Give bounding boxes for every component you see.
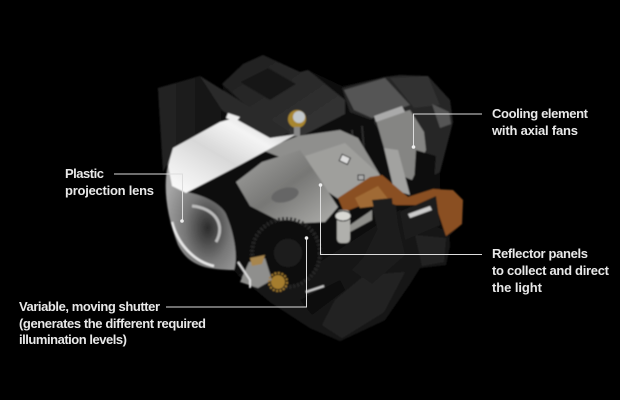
callout: variable moving shutter: illumination levels) [19,332,127,347]
callout: variable moving shutter: (generates the different required [19,316,206,331]
callout: plastic projection lens [65,166,184,223]
lens highlight [172,222,214,266]
callout: reflector panels: Reflector panels [492,246,588,261]
base silhouette [186,55,463,341]
lower black housing [238,210,450,341]
callout: cooling element: Cooling element [492,106,589,121]
shaft [306,286,324,292]
callout: cooling element [412,106,589,149]
reflector panel [305,143,380,200]
cooling element housing [342,75,453,182]
back plate [158,76,232,172]
callout: plastic projection lens: projection lens [65,183,154,198]
orange flex cable [338,175,463,236]
lens [166,165,236,270]
gear shutter [253,220,319,286]
interior dark band [186,155,325,245]
white lens cover [168,118,297,193]
callout: reflector panels: to collect and direct [492,263,610,278]
panel details [339,154,350,164]
metal post [337,210,350,243]
callout: reflector panels: the light [492,280,543,295]
lower housing ribs [322,272,405,338]
brass screw [288,110,306,128]
silver bracket [240,258,272,288]
dark clip on flex [362,198,396,262]
reflector arch [262,130,380,180]
callout: variable moving shutter: Variable, moving shutter [19,299,160,314]
upper black housing [222,55,345,137]
projector module illustration [158,55,463,341]
callout: variable moving shutter [19,236,308,347]
brass pinion gear [271,275,285,289]
cooling fins [345,118,378,178]
callout: cooling element: with axial fans [491,123,578,138]
callout: plastic projection lens: Plastic [65,166,104,181]
reflector drum [236,150,338,224]
callout: reflector panels [319,183,610,295]
